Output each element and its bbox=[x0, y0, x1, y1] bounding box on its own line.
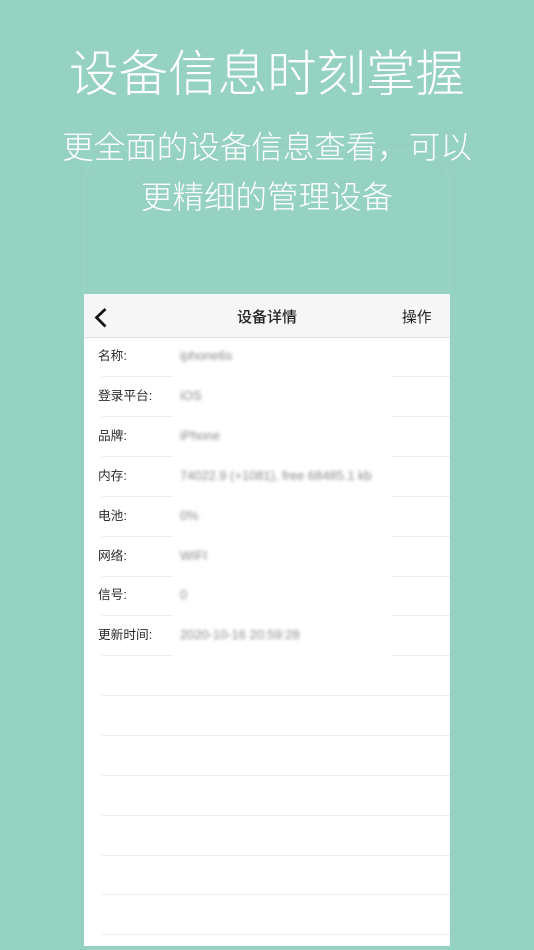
row label: memory: 内存: bbox=[98, 469, 127, 483]
row value: name: iphone6s bbox=[180, 348, 232, 363]
navigation bar bbox=[84, 294, 450, 338]
row value: platform: iOS bbox=[180, 388, 202, 403]
row label: platform: 登录平台: bbox=[98, 389, 152, 403]
screen heading: 设备详情 bbox=[237, 309, 297, 326]
row label: battery: 电池: bbox=[98, 509, 127, 523]
row label: brand: 品牌: bbox=[98, 429, 127, 443]
title: 设备信息时刻掌握 bbox=[69, 47, 465, 102]
row label: updated time: 更新时间: bbox=[98, 628, 152, 642]
row label: network: 网络: bbox=[98, 549, 127, 563]
row value: brand: iPhone bbox=[180, 428, 220, 443]
icon: back arrow bbox=[94, 308, 106, 328]
row value: network: WIFI bbox=[180, 548, 207, 563]
row value: updated time: 2020-10-16 20:59:28 bbox=[180, 627, 300, 642]
row label: signal: 信号: bbox=[98, 588, 127, 602]
row label: name: 名称: bbox=[98, 349, 127, 363]
subtitle line 2: 更精细的管理设备 bbox=[141, 179, 393, 215]
row value: memory: 74022.9 (+1081), free 68485.1 kb bbox=[180, 468, 372, 483]
subtitle line 1: 更全面的设备信息查看，可以 bbox=[62, 129, 472, 165]
row value: battery: 0% bbox=[180, 508, 199, 523]
panel: device details screen bbox=[84, 294, 450, 946]
row value: signal: 0 bbox=[180, 587, 187, 602]
faint phone outline bbox=[84, 150, 450, 294]
action button: 操作 bbox=[402, 310, 432, 326]
